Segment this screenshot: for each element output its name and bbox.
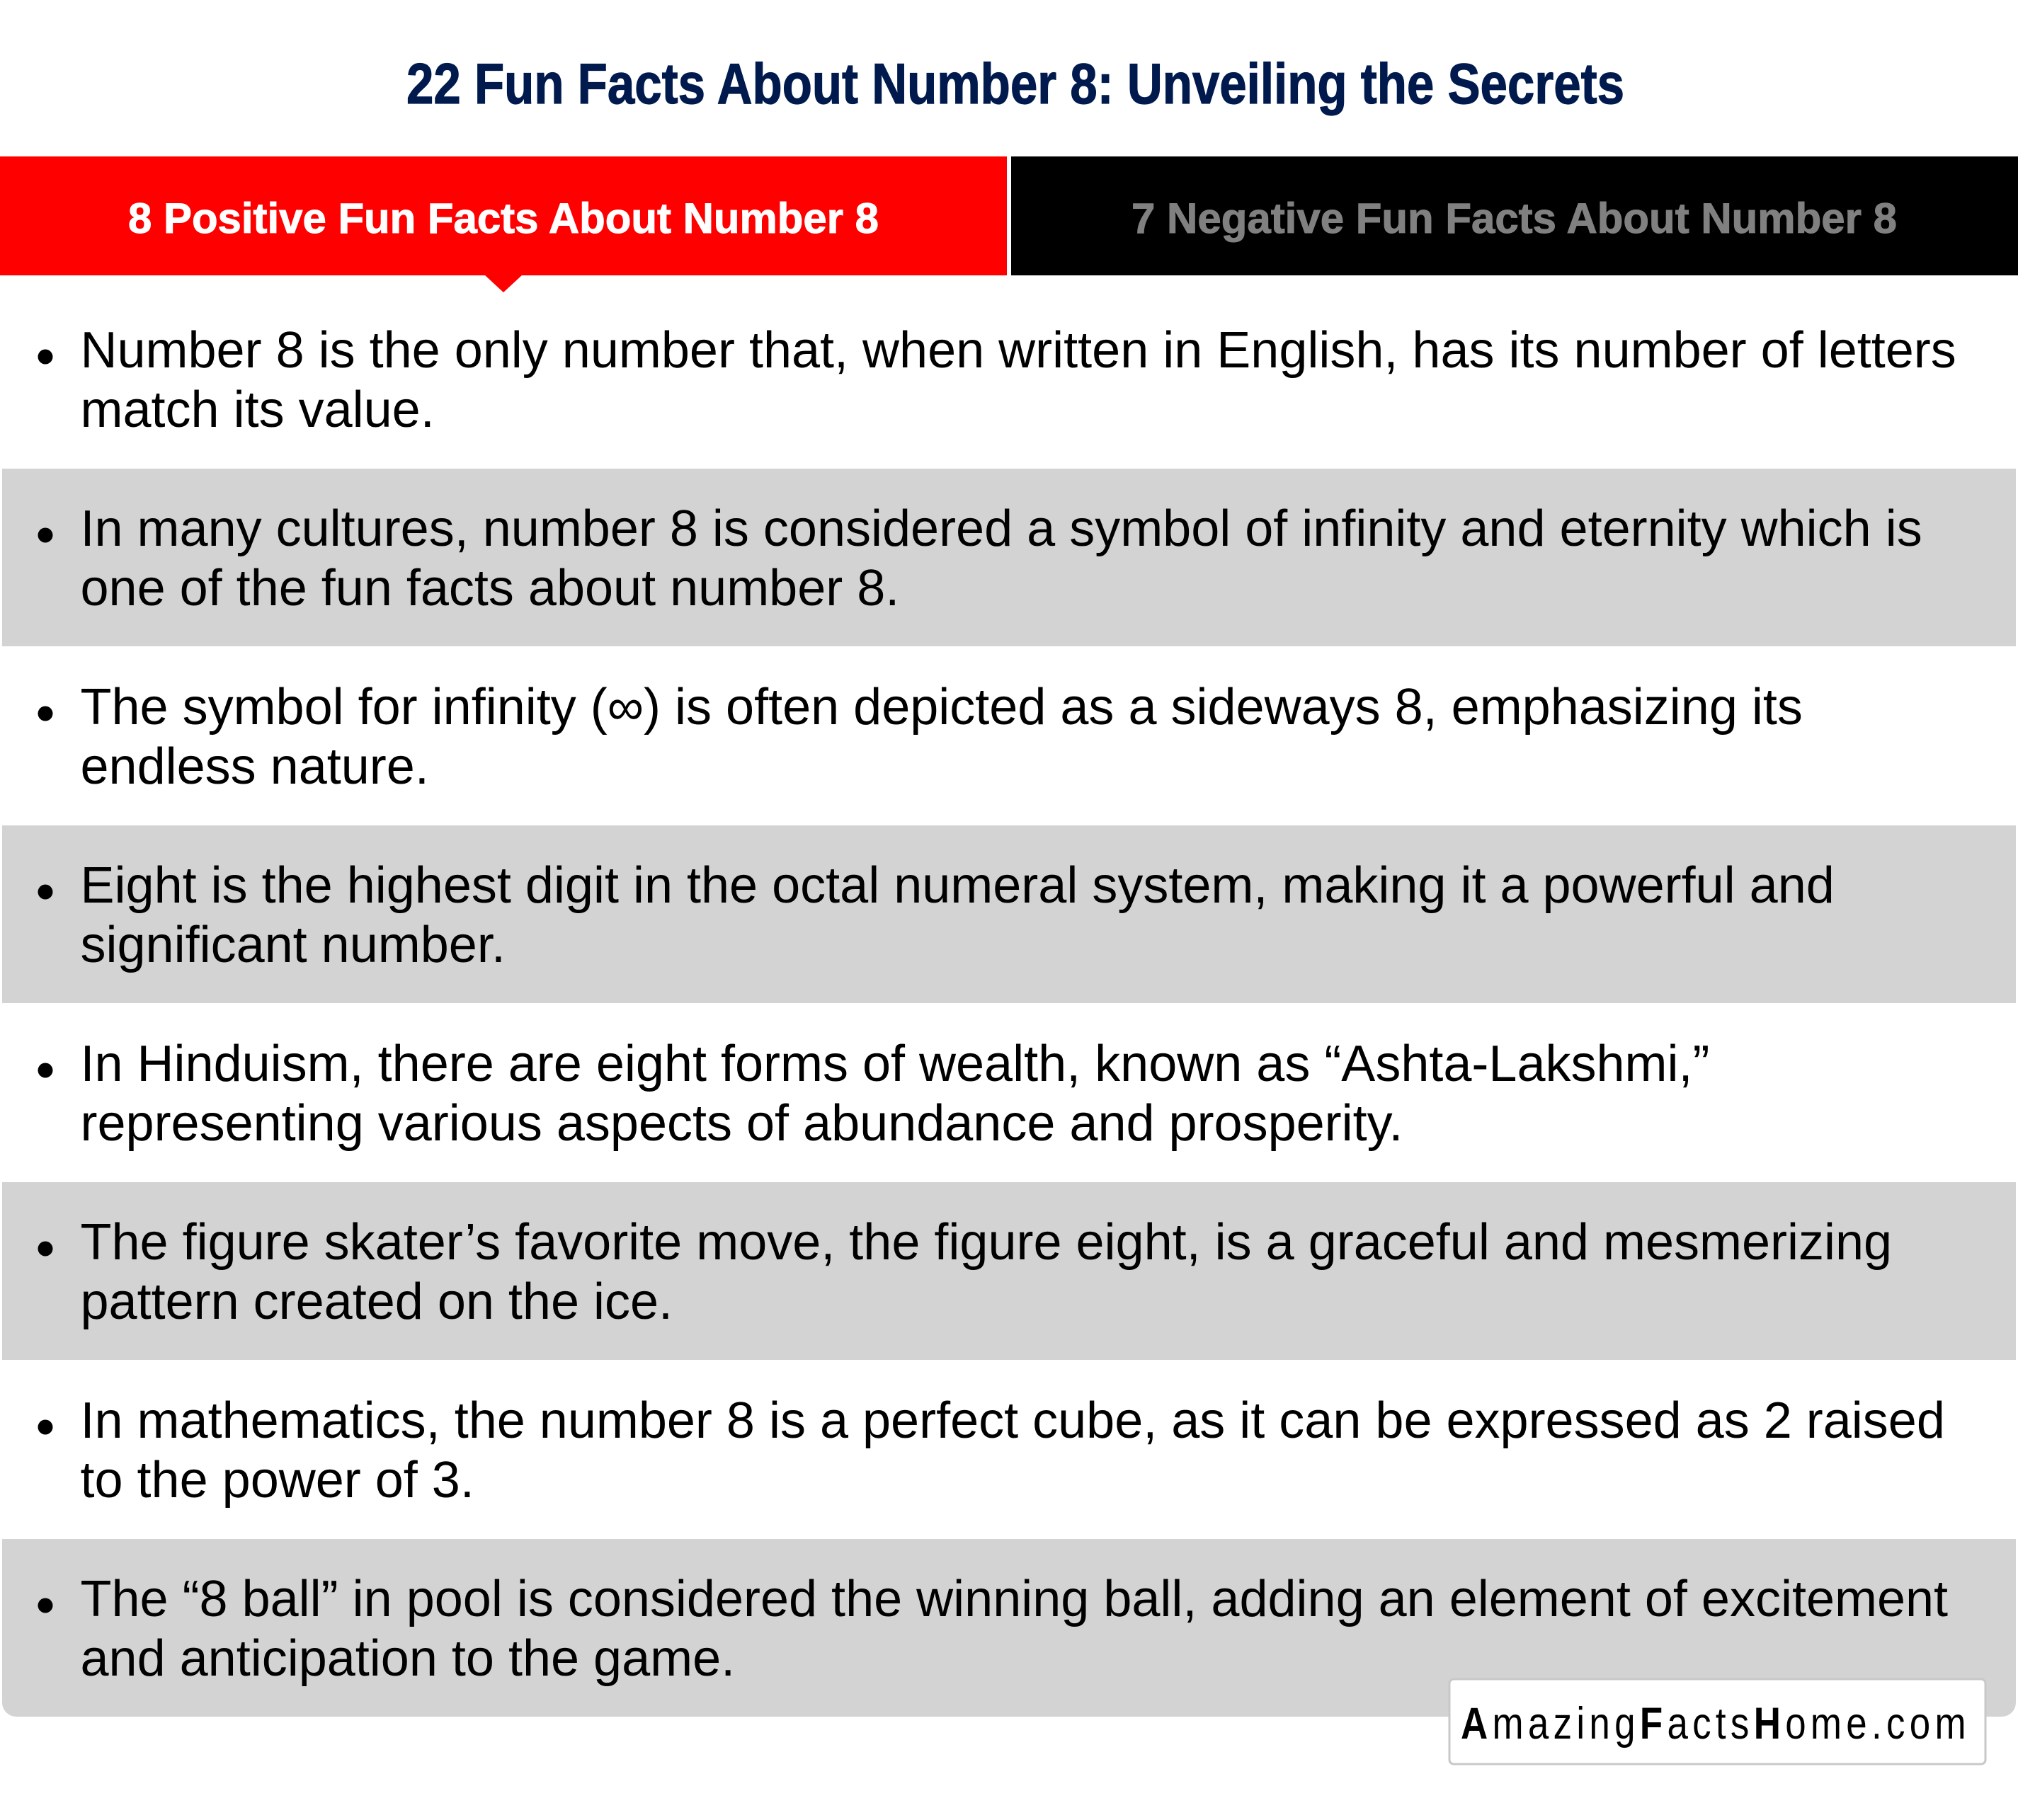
fact 2: [2, 469, 2016, 646]
title: 22 Fun Facts About Number 8: Unveiling the Secrets: [406, 52, 1624, 116]
fact 8: and anticipation to the game.: [81, 1630, 735, 1687]
fact 1: [38, 322, 1956, 438]
watermark: AmazingFactsHome.com: AmazingFactsHome.com: [1461, 1699, 1971, 1749]
fact 6: The figure skater’s favorite move, the figure eight, is a graceful and mesmerizing: [81, 1214, 1892, 1271]
fact 4: Eight is the highest digit in the octal numeral system, making it a powerful and: [81, 857, 1835, 914]
fact 2: In many cultures, number 8 is considered a symbol of infinity and eternity which is: [81, 500, 1922, 557]
fact 8: [2, 1539, 2016, 1717]
fact 1: match its value.: [81, 382, 435, 438]
fact 5: [38, 1036, 1709, 1152]
fact 7: to the power of 3.: [81, 1452, 474, 1509]
fact 2: one of the fun facts about number 8.: [81, 560, 899, 617]
fact 6: pattern created on the ice.: [81, 1274, 673, 1330]
watermark: AmazingFactsHome.com: [1449, 1679, 1985, 1764]
tab: positive facts: [0, 156, 1007, 292]
fact 1: Number 8 is the only number that, when written in English, has its number of letters: [81, 322, 1956, 379]
fact 3: [38, 679, 1803, 795]
tab: negative facts: 7 Negative Fun Facts About Number 8: [1131, 195, 1897, 242]
fact 3: The symbol for infinity (∞) is often depicted as a sideways 8, emphasizing its: [81, 679, 1803, 736]
fact 4: significant number.: [81, 917, 506, 973]
fact 7: In mathematics, the number 8 is a perfect cube, as it can be expressed as 2 raised: [81, 1392, 1945, 1449]
fact 7: [38, 1392, 1945, 1509]
fact 5: In Hinduism, there are eight forms of wealth, known as “Ashta-Lakshmi,”: [81, 1036, 1709, 1092]
fact 6: [2, 1182, 2016, 1360]
tab: negative facts: [1011, 156, 2018, 275]
fact 4: [2, 825, 2016, 1003]
fact 3: endless nature.: [81, 738, 429, 795]
fact 5: representing various aspects of abundance and prosperity.: [81, 1095, 1403, 1152]
fact 8: The “8 ball” in pool is considered the winning ball, adding an element of excitement: [81, 1571, 1948, 1627]
tab: positive facts: 8 Positive Fun Facts About Number 8: [128, 195, 879, 242]
